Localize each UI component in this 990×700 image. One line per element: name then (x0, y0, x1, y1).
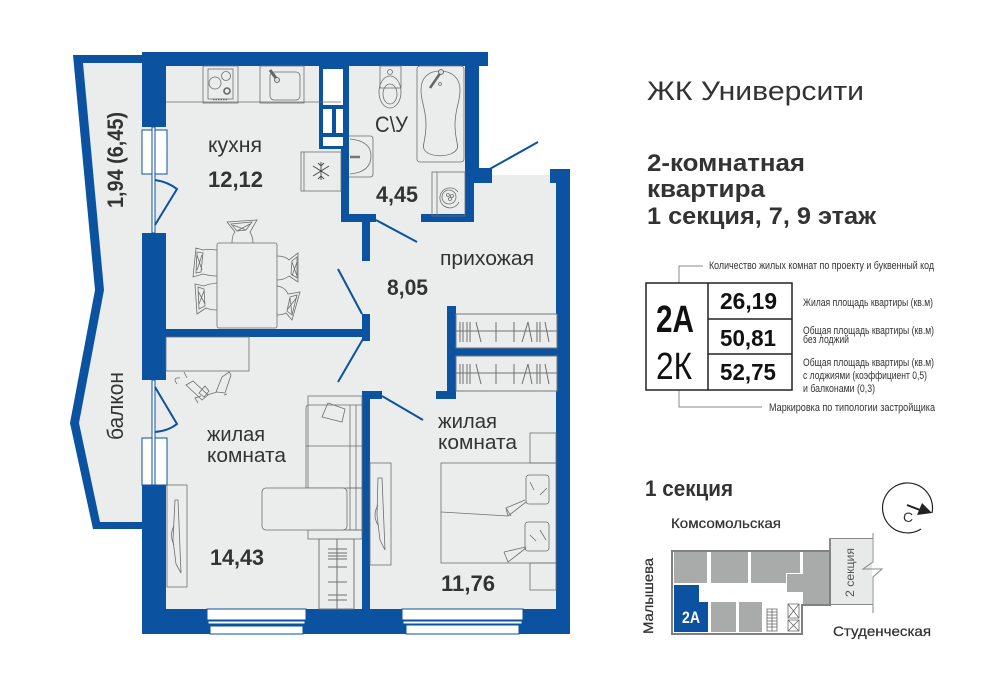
label: жилая комната left: комната (207, 445, 287, 467)
street label: Студенческая: Студенческая (833, 623, 931, 639)
label: жилая комната left: жилая (207, 424, 265, 446)
heading: apartment type: 2-комнатная (647, 150, 805, 177)
number: living room area: 14,43 (210, 545, 264, 570)
ventilation shaft (323, 69, 343, 146)
legend table: 52,75 (720, 359, 776, 385)
icon: kitchen sink (260, 66, 304, 103)
legend captions: Общая площадь квартиры (кв.м) (803, 357, 934, 369)
dining table with chairs (193, 220, 300, 328)
compass: С (903, 509, 913, 525)
label: балкон 1,94 (6,45): 1,94 (6,45) (103, 112, 128, 208)
section plan: 2А (682, 608, 700, 627)
wardrobe with hangers, hallway lower (456, 356, 557, 391)
legend table: 50,81 (720, 325, 776, 351)
kitchen window and balcony door (142, 127, 177, 233)
number: kitchen area: 12,12 (208, 167, 263, 192)
label: балкон: балкон (103, 372, 128, 440)
label: жилая комната right (438, 411, 518, 454)
icon: washing machine (432, 172, 465, 216)
apartment floor (142, 66, 556, 609)
number: hallway area: 8,05 (387, 275, 428, 300)
icon: fridge (301, 152, 341, 191)
legend captions: с лоджиями (коэффициент 0,5) (803, 370, 927, 382)
label: С\У: С\У (375, 112, 409, 137)
legend table: 2А (656, 299, 694, 341)
section plan: 2 секция (843, 548, 857, 597)
icon: bathtub (417, 66, 464, 162)
living room window and balcony door (142, 380, 177, 485)
label: кухня: кухня (208, 134, 262, 157)
walls (142, 52, 570, 634)
wardrobe with hangers, hallway upper (456, 314, 557, 348)
TV unit, bedroom (370, 463, 391, 565)
heading: section: 1 секция (645, 476, 733, 501)
icon: toilet (379, 66, 401, 108)
living room south window (207, 609, 306, 634)
number: bedroom area: 11,76 (441, 571, 495, 596)
street label: Комсомольская: Комсомольская (671, 515, 781, 531)
street label: Малышева: Малышева (640, 558, 656, 634)
bed (441, 433, 556, 590)
number: bathroom area: 4,45 (376, 182, 418, 207)
legend table: 2К (656, 346, 692, 388)
wardrobe in living room (319, 539, 354, 609)
section plan (672, 533, 882, 634)
icon: hob (203, 66, 238, 103)
legend captions: Маркировка по типологии застройщика (769, 402, 936, 414)
legend captions: и балконами (0,3) (803, 383, 875, 395)
sofa (262, 396, 362, 539)
label: жилая комната left (207, 424, 287, 467)
desk and office chair (166, 337, 249, 403)
legend captions: без лоджий (803, 334, 849, 346)
interior door leaves (338, 142, 538, 420)
legend captions: Количество жилых комнат по проекту и буквенный код (709, 260, 934, 272)
label: прихожая: прихожая (440, 248, 534, 270)
icon: bathroom sink (349, 136, 373, 177)
balcony (70, 55, 142, 529)
heading: apartment type: 1 секция, 7, 9 этаж (647, 203, 877, 230)
compass (883, 483, 933, 533)
heading: apartment type (647, 150, 877, 230)
label: жилая комната right: жилая (438, 411, 497, 433)
label: жилая комната right: комната (438, 432, 518, 454)
bedroom south window (402, 609, 523, 634)
legend table: 26,19 (720, 288, 777, 314)
title: ЖК Университи (647, 76, 864, 106)
TV unit, living room (167, 485, 187, 587)
legend captions: Жилая площадь квартиры (кв.м) (803, 297, 933, 309)
legend captions: Общая площадь квартиры (кв.м) (803, 325, 934, 337)
heading: apartment type: квартира (647, 176, 766, 203)
legend table (646, 266, 792, 407)
legend captions (709, 260, 936, 414)
kitchen counter (166, 66, 341, 103)
